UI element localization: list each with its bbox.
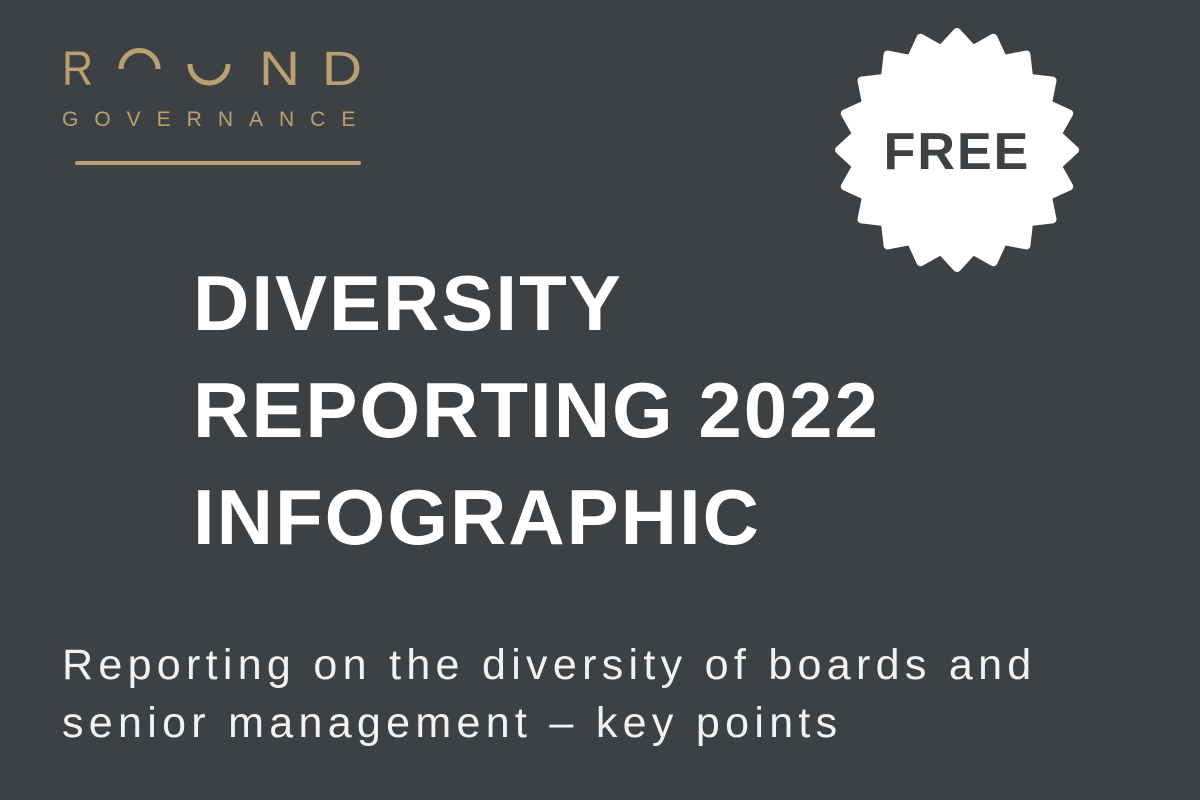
logo arc U bbox=[190, 64, 228, 83]
subtitle bbox=[62, 641, 1037, 747]
subtitle: Reporting on the diversity of boards and bbox=[62, 641, 1037, 689]
logo arc O bbox=[121, 51, 158, 69]
title: DIVERSITY bbox=[193, 259, 623, 347]
logo letter R: R bbox=[62, 43, 93, 96]
badge: FREE: FREE bbox=[884, 123, 1030, 181]
title bbox=[193, 259, 880, 561]
subtitle: senior management – key points bbox=[62, 699, 842, 747]
logo letter D: D bbox=[322, 43, 362, 96]
title: INFOGRAPHIC bbox=[193, 473, 761, 561]
badge: FREE bbox=[835, 28, 1079, 272]
logo GOVERNANCE: GOVERNANCE bbox=[62, 108, 371, 131]
logo letter N: N bbox=[259, 43, 300, 96]
logo: Round Governance bbox=[62, 43, 371, 165]
title: REPORTING 2022 bbox=[193, 366, 880, 454]
